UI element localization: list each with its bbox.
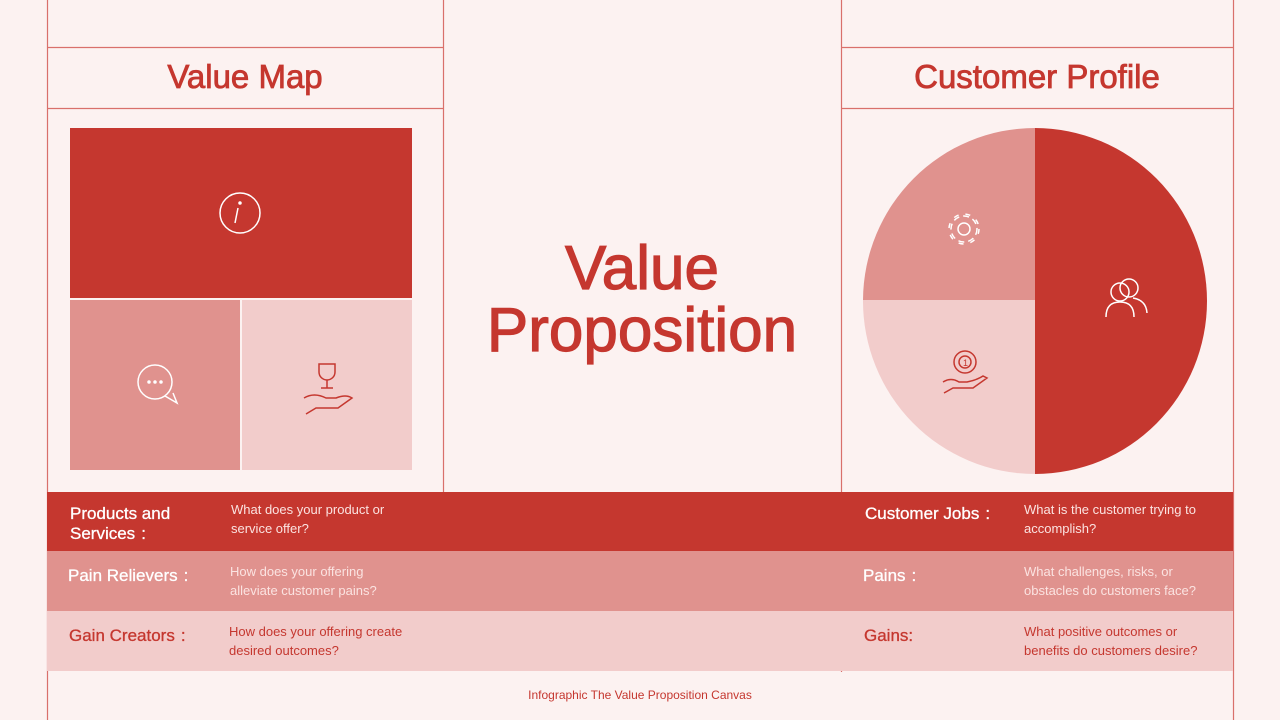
band: row 2 xyxy=(47,551,1233,611)
text: pains question: What challenges, risks, or xyxy=(1024,564,1173,579)
icon: users xyxy=(1106,279,1147,317)
text: pain relievers question: alleviate customer pains? xyxy=(230,583,377,598)
text: gain creators question: How does your offering create xyxy=(229,624,402,639)
label: Customer Jobs: Customer Jobs : xyxy=(865,504,990,523)
label: Pains: Pains : xyxy=(863,566,916,585)
band: row 3 xyxy=(47,611,1233,671)
icon: chat xyxy=(138,365,177,403)
text: gains question: benefits do customers desire? xyxy=(1024,643,1197,658)
text: gain creators question: desired outcomes? xyxy=(229,643,339,658)
label: Gains: Gains: xyxy=(864,626,913,645)
icon: info xyxy=(220,193,260,233)
icon: trophy hand xyxy=(304,364,352,414)
text: products question xyxy=(231,502,384,536)
label: Products and Services: Services : xyxy=(70,524,146,543)
text: pains question: obstacles do customers face? xyxy=(1024,583,1196,598)
text: pains question xyxy=(1024,564,1196,598)
text: pain relievers question xyxy=(230,564,377,598)
text: pain relievers question: How does your offering xyxy=(230,564,363,579)
label: Gain Creators: Gain Creators : xyxy=(69,626,186,645)
text: gain creators question xyxy=(229,624,402,658)
text: products question: What does your product or xyxy=(231,502,384,517)
title: Value Proposition: Proposition xyxy=(487,296,797,365)
text: products question: service offer? xyxy=(231,521,309,536)
icon: coin hand xyxy=(943,351,987,393)
text: customer jobs question xyxy=(1024,502,1196,536)
chart: customer profile circle xyxy=(863,128,1207,474)
title: Value Proposition: Value xyxy=(565,234,719,303)
label: Products and Services: Products and xyxy=(70,504,170,523)
text: gains question: What positive outcomes or xyxy=(1024,624,1177,639)
text: gains question xyxy=(1024,624,1197,658)
icon: gear xyxy=(949,214,979,244)
label: Pain Relievers: Pain Relievers : xyxy=(68,566,188,585)
band: row 1 xyxy=(47,492,1233,551)
text: customer jobs question: What is the customer trying to xyxy=(1024,502,1196,517)
text: customer jobs question: accomplish? xyxy=(1024,521,1096,536)
label: Products and Services xyxy=(70,504,170,543)
footer caption: Infographic The Value Proposition Canvas xyxy=(528,688,752,702)
panel: value map blocks xyxy=(70,128,412,470)
title: Value Proposition xyxy=(487,234,797,365)
chart: customer profile circle: 1 xyxy=(963,358,968,368)
heading: Value Map: Value Map xyxy=(167,58,323,95)
heading: Customer Profile: Customer Profile xyxy=(914,58,1160,95)
